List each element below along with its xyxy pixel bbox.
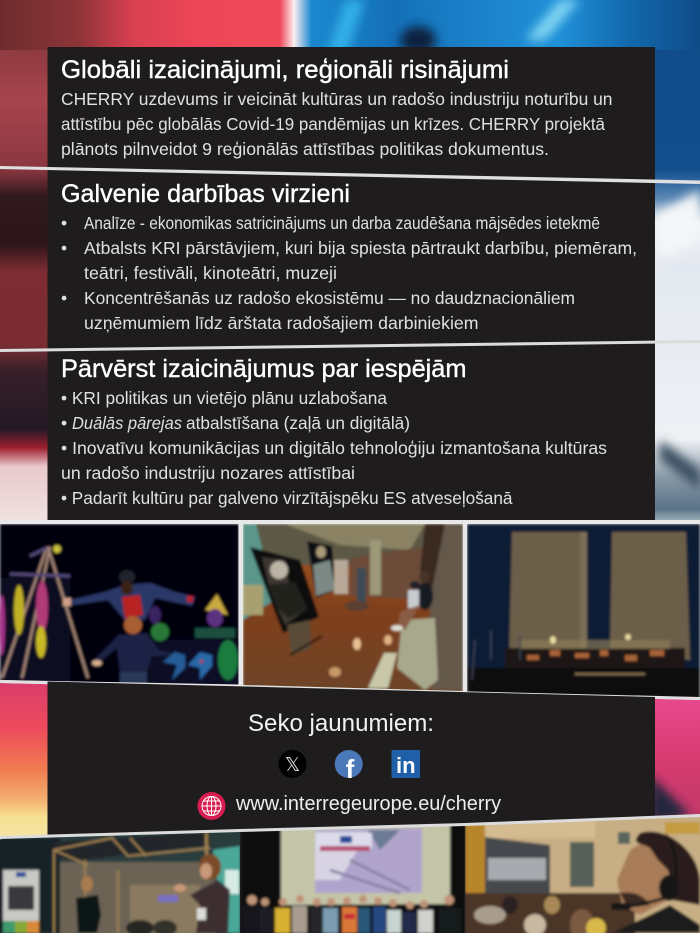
heading: follow: Seko jaunumiem: [248,710,434,737]
text block: global challenges [61,89,612,159]
bullet list: opportunities: • [61,413,67,433]
background artwork: lower abstract paint [0,680,700,840]
icon: X: 𝕏 [285,755,300,776]
divider above lower photos [0,814,700,839]
heading: global challenges: Globāli izaicinājumi, reģionāli risinājumi [61,56,509,84]
divider line 1 [0,166,700,184]
divider line 2 [0,340,700,352]
bullet list: main lines of action [61,213,637,333]
photo strip background [0,520,700,700]
bullet list: opportunities: • KRI politikas un vietējo plānu uzlabošana [61,388,387,408]
bullet list: opportunities: • Inovatīvu komunikācijas un digitālo tehnoloģiju izmantošana kultūras [61,438,607,458]
text block: global challenges: CHERRY uzdevums ir veicināt kultūras un radošo industriju noturību un [61,89,612,109]
heading: turning challenges into opportunities: Pārvērst izaicinājumus par iespējām [61,355,466,383]
bullet list: opportunities: Duālās pārejas [72,413,182,433]
background artwork: upper abstract paint [0,0,700,530]
divider under photo strip [0,680,700,700]
photo: group on stage [241,820,465,933]
bullet list: main lines of action: • [61,288,67,308]
panel background [48,682,655,836]
bullet list: main lines of action: • [61,238,67,258]
icon: Facebook: f [346,754,355,784]
photo: stage performance [0,524,240,688]
section: global challenges [61,56,612,159]
bullet list: opportunities [61,388,607,508]
photo: open-air orchestra [467,524,700,700]
link: website: www.interregeurope.eu/cherry [235,793,501,815]
icon: Facebook [335,750,363,784]
section: main lines of action [61,180,637,333]
bullet list: main lines of action: • [61,213,67,233]
icon: X [278,750,306,778]
bullet list: opportunities: atbalstīšana (zaļā un digitālā) [186,413,410,433]
bullet list: main lines of action: uzņēmumiem līdz ārštata radošajiem darbiniekiem [84,313,478,333]
bullet list: main lines of action: teātri, festivāli, kinoteātri, muzeji [84,263,337,283]
icon: LinkedIn: in [396,753,416,778]
bullet list: opportunities: • Padarīt kultūru par galveno virzītājspēku ES atveseļošanā [61,488,513,508]
photo: conference speaker [0,825,241,933]
bullet list: main lines of action: Analīze - ekonomikas satricinājums un darba zaudēšana mājsēdes ietekmē [84,213,600,233]
icon: LinkedIn [392,750,420,778]
section: turning challenges into opportunities [61,355,607,508]
photo: museum gallery [243,524,463,694]
panel: follow us [48,682,655,836]
panel: text background [48,47,655,520]
photo: audience and interpreter [465,815,700,933]
icon: globe [198,792,226,820]
text block: global challenges: attīstību pēc globālās Covid-19 pandēmijas un krīzes. CHERRY projektā [61,114,605,134]
bullet list: main lines of action: Koncentrēšanās uz radošo ekosistēmu — no daudznacionāliem [84,288,575,308]
heading: main lines of action: Galvenie darbības virzieni [61,180,350,208]
bullet list: main lines of action: Atbalsts KRI pārstāvjiem, kuri bija spiesta pārtraukt darbību, piemēram, [84,238,637,258]
bullet list: opportunities: un radošo industriju nozares attīstībai [61,463,355,483]
text block: global challenges: plānots pilnveidot 9 reģionālās attīstības politikas dokumentus. [61,139,549,159]
